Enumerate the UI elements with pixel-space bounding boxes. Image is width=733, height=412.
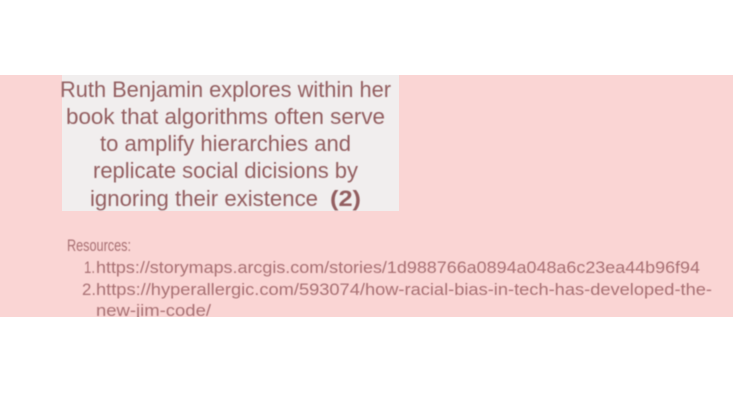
text block: quote about algorithms: ignoring their existence <box>90 186 318 211</box>
text block: resources list: https://storymaps.arcgis.com/stories/1d988766a0894a048a6c23ea44b96f94 <box>96 259 700 277</box>
text block: resources list: https://hyperallergic.com/593074/how-racial-bias-in-tech-has-developed-the- <box>96 281 712 299</box>
panel: pink background band <box>0 75 733 317</box>
panel: grey quote box <box>62 75 399 211</box>
text block: resources list: Resources: <box>67 237 131 255</box>
text block: resources list <box>67 237 712 320</box>
text block: quote about algorithms: (2) <box>330 186 361 211</box>
text block: resources list: new-jim-code/ <box>96 302 211 320</box>
text block: resources list: 2. <box>82 281 96 299</box>
text block: quote about algorithms: book that algorithms often serve <box>66 104 385 129</box>
text block: resources list: 1. <box>84 259 95 277</box>
text block: quote about algorithms: replicate social dicisions by <box>93 158 358 183</box>
text block: quote about algorithms <box>60 77 391 211</box>
text block: quote about algorithms: to amplify hierarchies and <box>100 131 351 156</box>
text block: quote about algorithms: Ruth Benjamin explores within her <box>60 77 391 102</box>
